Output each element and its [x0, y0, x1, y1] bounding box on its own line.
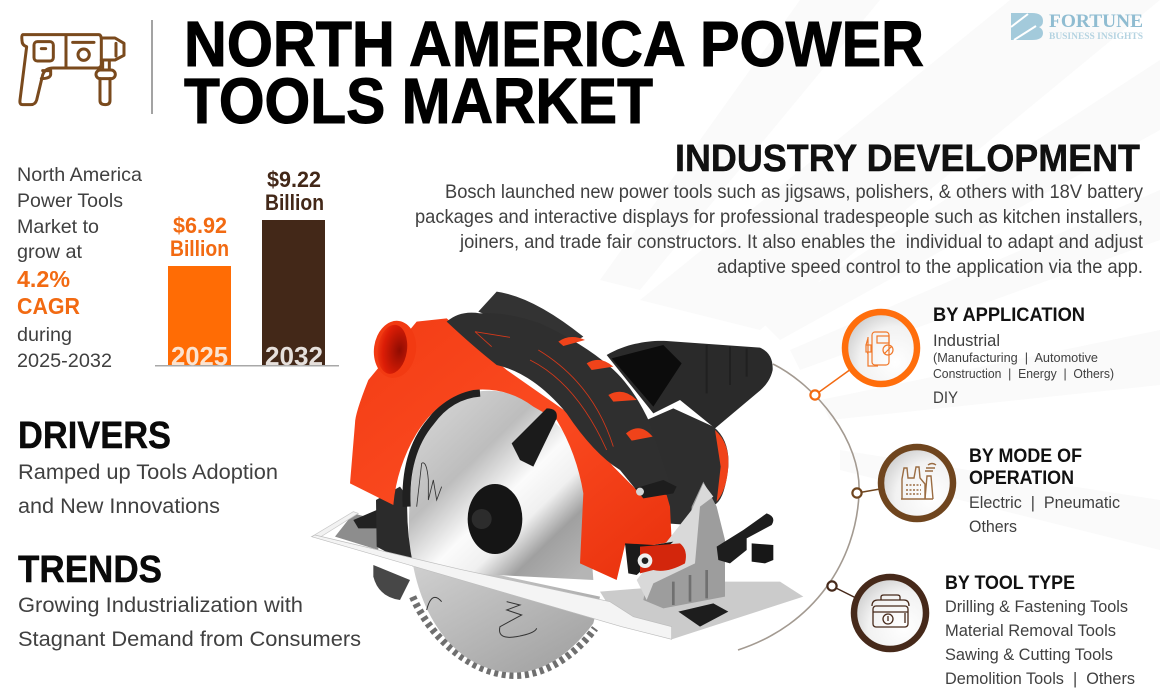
- illustration: circular saw: [312, 292, 803, 675]
- title: [184, 8, 924, 137]
- saw: lower guard: [373, 565, 410, 600]
- bar chart: market size: $9.22: [267, 167, 321, 192]
- saw: base plate rear: [600, 582, 803, 639]
- text block: CAGR summary: Market to: [17, 216, 99, 238]
- text block: CAGR summary: 4.2%: [17, 266, 70, 292]
- panel: by application: (Manufacturing | Automotive: [933, 351, 1098, 365]
- panel: by mode of operation: Electric | Pneumatic: [969, 493, 1120, 512]
- text block: drivers: [18, 415, 278, 518]
- panel: by application: Industrial: [933, 331, 1000, 350]
- text block: drivers: Ramped up Tools Adoption: [18, 460, 278, 484]
- saw: front clamp: [635, 480, 677, 498]
- saw: rear handle: [607, 341, 773, 428]
- text block: CAGR summary: grow at: [17, 241, 83, 263]
- saw: rear base tab: [335, 513, 378, 550]
- connector dots: [810, 369, 880, 598]
- icon: rotary hammer drill: [20, 35, 124, 105]
- text block: trends: [18, 549, 361, 651]
- text block: drivers: and New Innovations: [18, 494, 220, 518]
- divider: [151, 20, 153, 114]
- saw: blade guard lever: [512, 408, 557, 467]
- bar 2025: [168, 266, 231, 366]
- title: NORTH AMERICA POWER: [184, 8, 924, 80]
- text block: trends: TRENDS: [18, 549, 162, 591]
- connector arc: [738, 364, 859, 650]
- text block: industry development description: [415, 181, 1144, 278]
- panel: by tool type: Sawing & Cutting Tools: [945, 645, 1113, 664]
- saw: dust port: [370, 318, 420, 381]
- icon: toolbox: [854, 577, 926, 649]
- panel: by mode of operation: BY MODE OF: [969, 445, 1082, 467]
- panel: by tool type: Drilling & Fastening Tools: [945, 597, 1128, 616]
- saw: orange guard: [350, 318, 672, 580]
- text block: trends: Growing Industrialization with: [18, 593, 303, 617]
- bar chart: market size: $6.92: [173, 213, 227, 238]
- saw: top cover: [478, 292, 583, 347]
- panel: by application: Construction | Energy | Others): [933, 367, 1114, 381]
- saw: hinge: [625, 542, 673, 575]
- saw: blade teeth: [413, 597, 595, 675]
- panel: by application: DIY: [933, 388, 958, 407]
- text block: CAGR summary: North America: [17, 164, 142, 186]
- panel: by tool type: Demolition Tools | Others: [945, 669, 1135, 688]
- heading: industry development: INDUSTRY DEVELOPMENT: [675, 138, 1140, 180]
- saw: motor body: [647, 408, 728, 525]
- title: TOOLS MARKET: [184, 65, 653, 137]
- panel: by tool type: BY TOOL TYPE: [945, 572, 1075, 594]
- text block: drivers: DRIVERS: [18, 415, 171, 457]
- bar 2032: [262, 220, 325, 366]
- saw: base plate front strip: [312, 535, 672, 639]
- panel: by application: BY APPLICATION: [933, 304, 1085, 326]
- saw: blade hub: [468, 484, 522, 554]
- panel: by mode of operation: OPERATION: [969, 467, 1074, 489]
- bar chart: market size: [155, 167, 339, 371]
- panel: by mode of operation: Others: [969, 517, 1017, 536]
- saw: wing nut: [717, 513, 773, 563]
- text block: CAGR summary: [17, 164, 142, 372]
- logo: Fortune Business Insights: FORTUNE: [1049, 11, 1143, 32]
- saw: depth knob: [752, 543, 773, 563]
- panel: by tool type: Material Removal Tools: [945, 621, 1116, 640]
- logo: Fortune Business Insights: BUSINESS INSIGHTS: [1049, 32, 1143, 42]
- bar chart: market size: 2025: [171, 341, 228, 371]
- panel: by tool type: [854, 572, 1135, 688]
- bar chart: market size: Billion: [265, 190, 324, 215]
- text block: CAGR summary: 2025-2032: [17, 350, 112, 372]
- text block: trends: Stagnant Demand from Consumers: [18, 627, 361, 651]
- bar chart: market size: 2032: [265, 341, 323, 371]
- text block: CAGR summary: CAGR: [17, 293, 80, 319]
- bar chart: market size: Billion: [170, 236, 229, 261]
- saw: upper blade: [409, 391, 593, 580]
- icon: factory: [881, 447, 953, 519]
- panel: by application: [845, 304, 1114, 407]
- saw: inner guard: [376, 487, 413, 567]
- panel: by mode of operation: [881, 445, 1120, 536]
- saw: casting and depth adjust: [643, 482, 725, 608]
- saw: grip: [447, 313, 677, 497]
- icon: multimeter: [845, 312, 917, 384]
- saw: lower blade: [413, 567, 600, 673]
- text block: CAGR summary: during: [17, 324, 72, 346]
- logo: Fortune Business Insights: [1011, 11, 1143, 42]
- text block: CAGR summary: Power Tools: [17, 190, 123, 212]
- text block: industry development description: adaptive speed control to the application via the app.: [717, 256, 1143, 278]
